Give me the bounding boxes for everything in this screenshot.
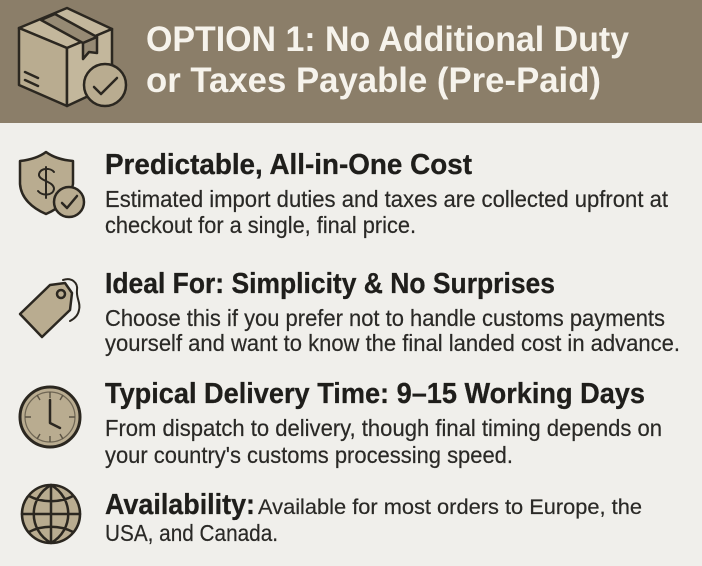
- item: predictable cost: [20, 149, 669, 238]
- item: ideal for: [20, 268, 680, 356]
- icon: clock: [20, 387, 80, 447]
- icon: globe: [22, 485, 80, 543]
- description: Estimated import duties and taxes are collected upfront at: [105, 186, 669, 212]
- title: OPTION 1: No Additional Duty: [146, 20, 630, 59]
- heading: Predictable, All-in-One Cost: [105, 149, 472, 181]
- icon: shield with dollar and check: [20, 152, 84, 217]
- title: or Taxes Payable (Pre-Paid): [146, 61, 601, 100]
- header banner: [0, 0, 702, 123]
- description: your country's customs processing speed.: [105, 442, 513, 468]
- description: yourself and want to know the final landed cost in advance.: [105, 330, 680, 356]
- item: availability: [22, 485, 642, 546]
- heading: Typical Delivery Time: 9–15 Working Days: [105, 378, 645, 410]
- icon: box with check: [19, 8, 126, 106]
- description: Available for most orders to Europe, the: [258, 495, 642, 519]
- description: Choose this if you prefer not to handle customs payments: [105, 305, 665, 331]
- description: USA, and Canada.: [105, 520, 278, 546]
- description: [105, 415, 662, 468]
- description: [105, 186, 669, 238]
- description: checkout for a single, final price.: [105, 212, 416, 238]
- heading: Ideal For: Simplicity & No Surprises: [105, 268, 555, 300]
- item: delivery time: [20, 378, 662, 468]
- description: [105, 305, 680, 356]
- description: From dispatch to delivery, though final timing depends on: [105, 415, 662, 441]
- description: [105, 489, 642, 546]
- description: Availability:: [105, 489, 255, 521]
- title: [146, 20, 630, 100]
- icon: price tag: [20, 279, 79, 337]
